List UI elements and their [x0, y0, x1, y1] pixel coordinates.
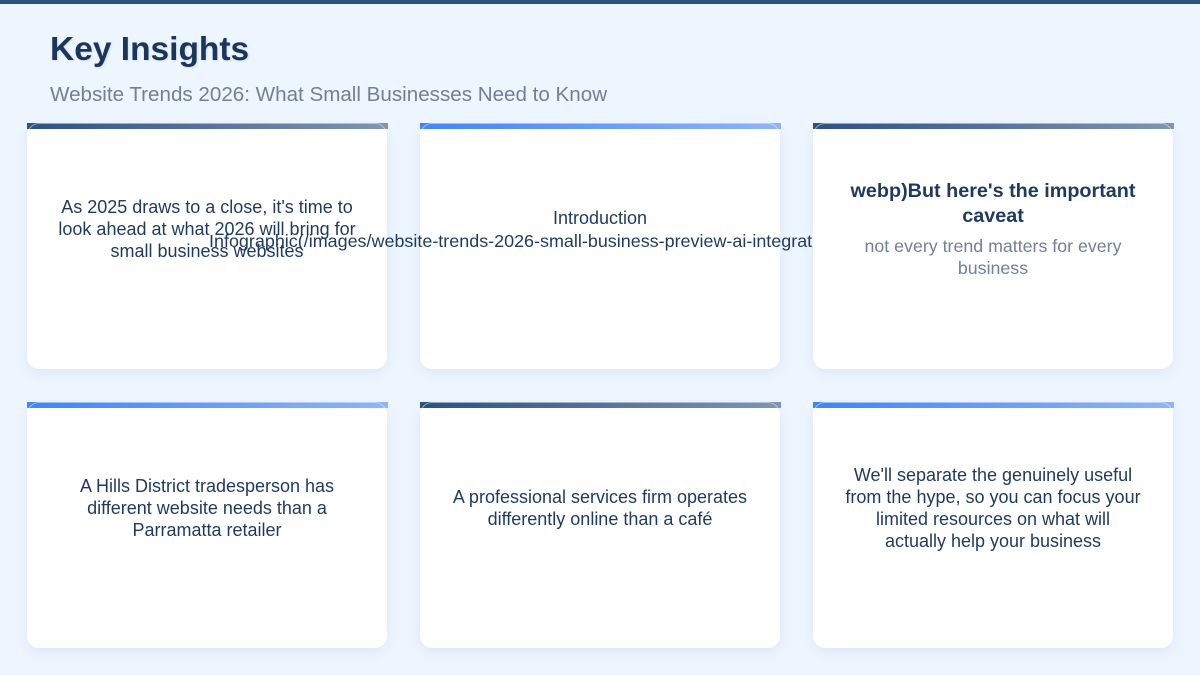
card 3 heading [850, 180, 1136, 227]
title: Key Insights [50, 31, 249, 68]
card 3 body text: business [958, 258, 1028, 278]
card 3 heading: webp)But here's the important [851, 180, 1135, 202]
card 5 text: differently online than a café [488, 508, 712, 528]
card 3 body text: not every trend matters for every [865, 236, 1121, 256]
card 6 text: We'll separate the genuinely useful [854, 464, 1132, 484]
card 6 text: from the hype, so you can focus your [845, 486, 1141, 506]
top accent bar [0, 0, 1200, 4]
card 1 text: look ahead at what 2026 will bring for [58, 219, 356, 239]
card 1 text [58, 197, 356, 261]
card 5 text: A professional services firm operates [453, 486, 747, 506]
card 4 accent bar [27, 402, 388, 408]
card 5 accent bar [420, 402, 781, 408]
card 5 text [453, 486, 747, 529]
card 6 text [845, 464, 1141, 551]
panel: card 1 [27, 123, 387, 369]
card 4 text: different website needs than a [87, 498, 327, 518]
card 3 heading: caveat [962, 205, 1024, 227]
card 4 text: Parramatta retailer [132, 520, 282, 540]
card 2 heading text: Introduction [553, 208, 647, 228]
card 6 text: limited resources on what will [876, 508, 1110, 528]
card 2 accent bar [420, 123, 781, 129]
card 4 text: A Hills District tradesperson has [80, 476, 334, 496]
card 4 text [80, 476, 334, 540]
overflowing image path text: Infographic(/images/website-trends-2026-small-business-preview-ai-integration.webp [209, 231, 884, 251]
card 3 body text [865, 236, 1122, 278]
subtitle: Website Trends 2026: What Small Businesses Need to Know [50, 83, 607, 106]
panel: card 3 [813, 123, 1173, 369]
card 1 accent bar [27, 123, 388, 129]
panel: card 2 [420, 123, 780, 369]
panel: card 4 [27, 402, 387, 648]
card 3 accent bar [813, 123, 1174, 129]
panel: card 5 [420, 402, 780, 648]
card 1 text: As 2025 draws to a close, it's time to [61, 197, 353, 217]
card 6 accent bar [813, 402, 1174, 408]
card 1 text: small business websites [110, 241, 304, 261]
card 6 text: actually help your business [885, 530, 1101, 550]
panel: card 6 [813, 402, 1173, 648]
